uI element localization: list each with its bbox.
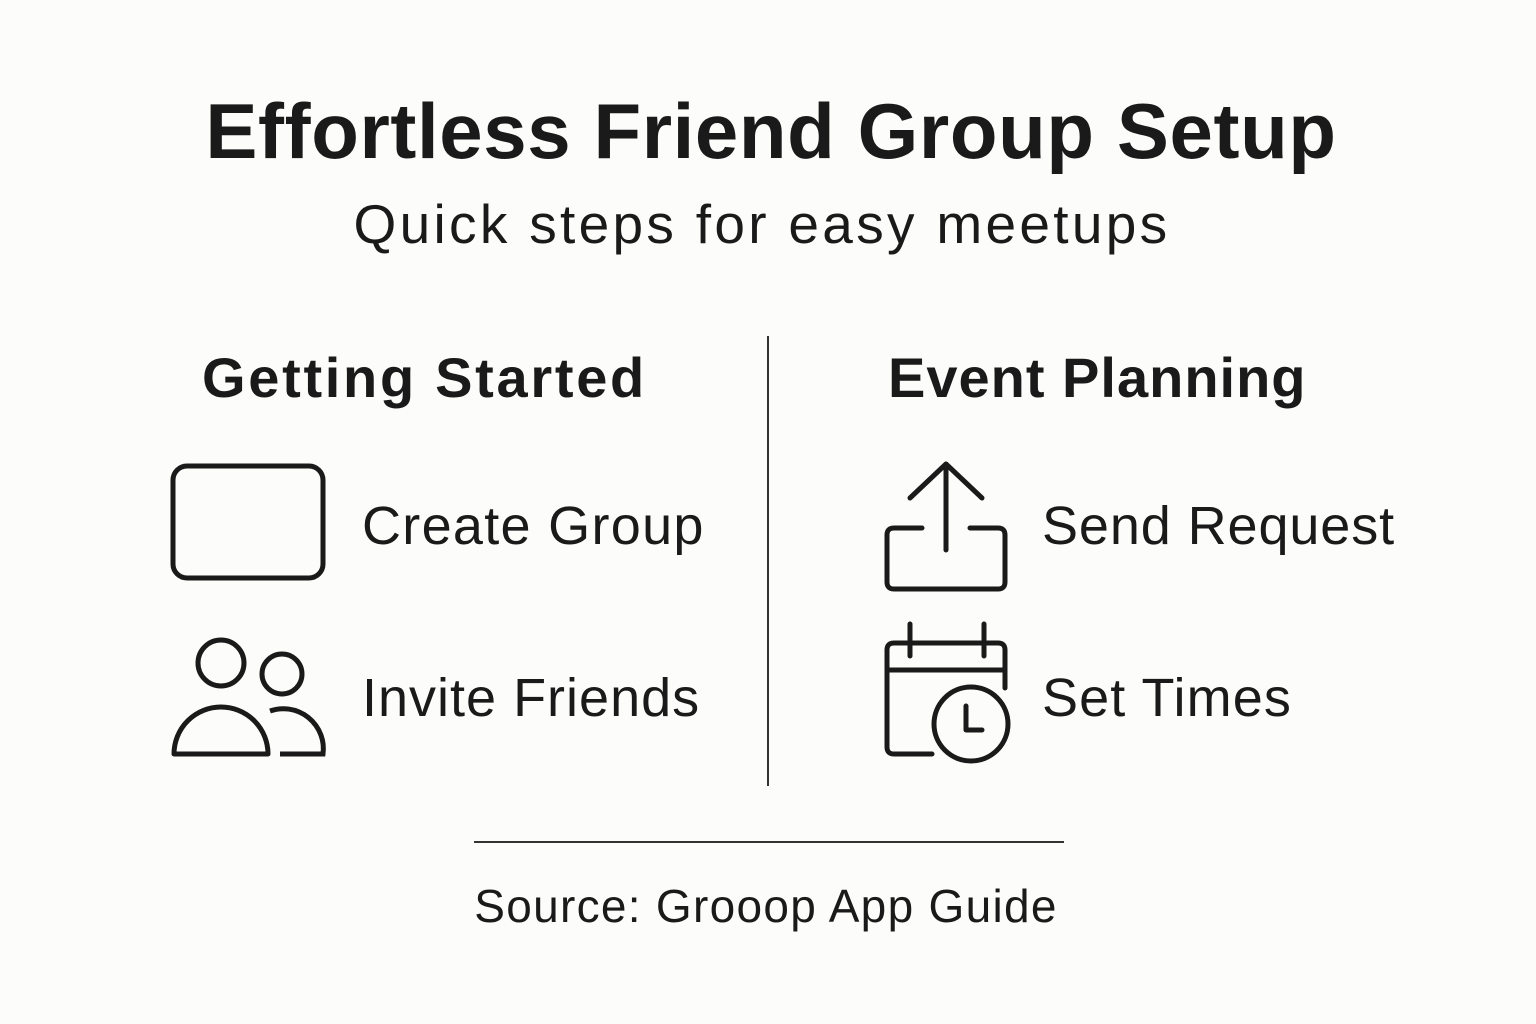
- subtitle: Quick steps for easy meetups: [354, 193, 1170, 255]
- heading: Getting Started: Getting Started: [202, 346, 647, 409]
- icon: rectangle: [170, 464, 326, 580]
- icon: calendar clock: [884, 622, 1010, 764]
- label: Create Group: Create Group: [362, 496, 705, 556]
- label: Invite Friends: Invite Friends: [362, 668, 700, 728]
- label: Send Request: Send Request: [1042, 496, 1395, 556]
- icon: share: [884, 462, 1008, 592]
- divider vertical: [767, 336, 769, 786]
- title: Effortless Friend Group Setup: [205, 87, 1337, 175]
- source: Source: Grooop App Guide: [474, 880, 1058, 932]
- heading: Event Planning: Event Planning: [888, 346, 1306, 409]
- icon: people: [172, 638, 326, 756]
- divider horizontal: [474, 841, 1064, 843]
- label: Set Times: Set Times: [1042, 668, 1292, 728]
